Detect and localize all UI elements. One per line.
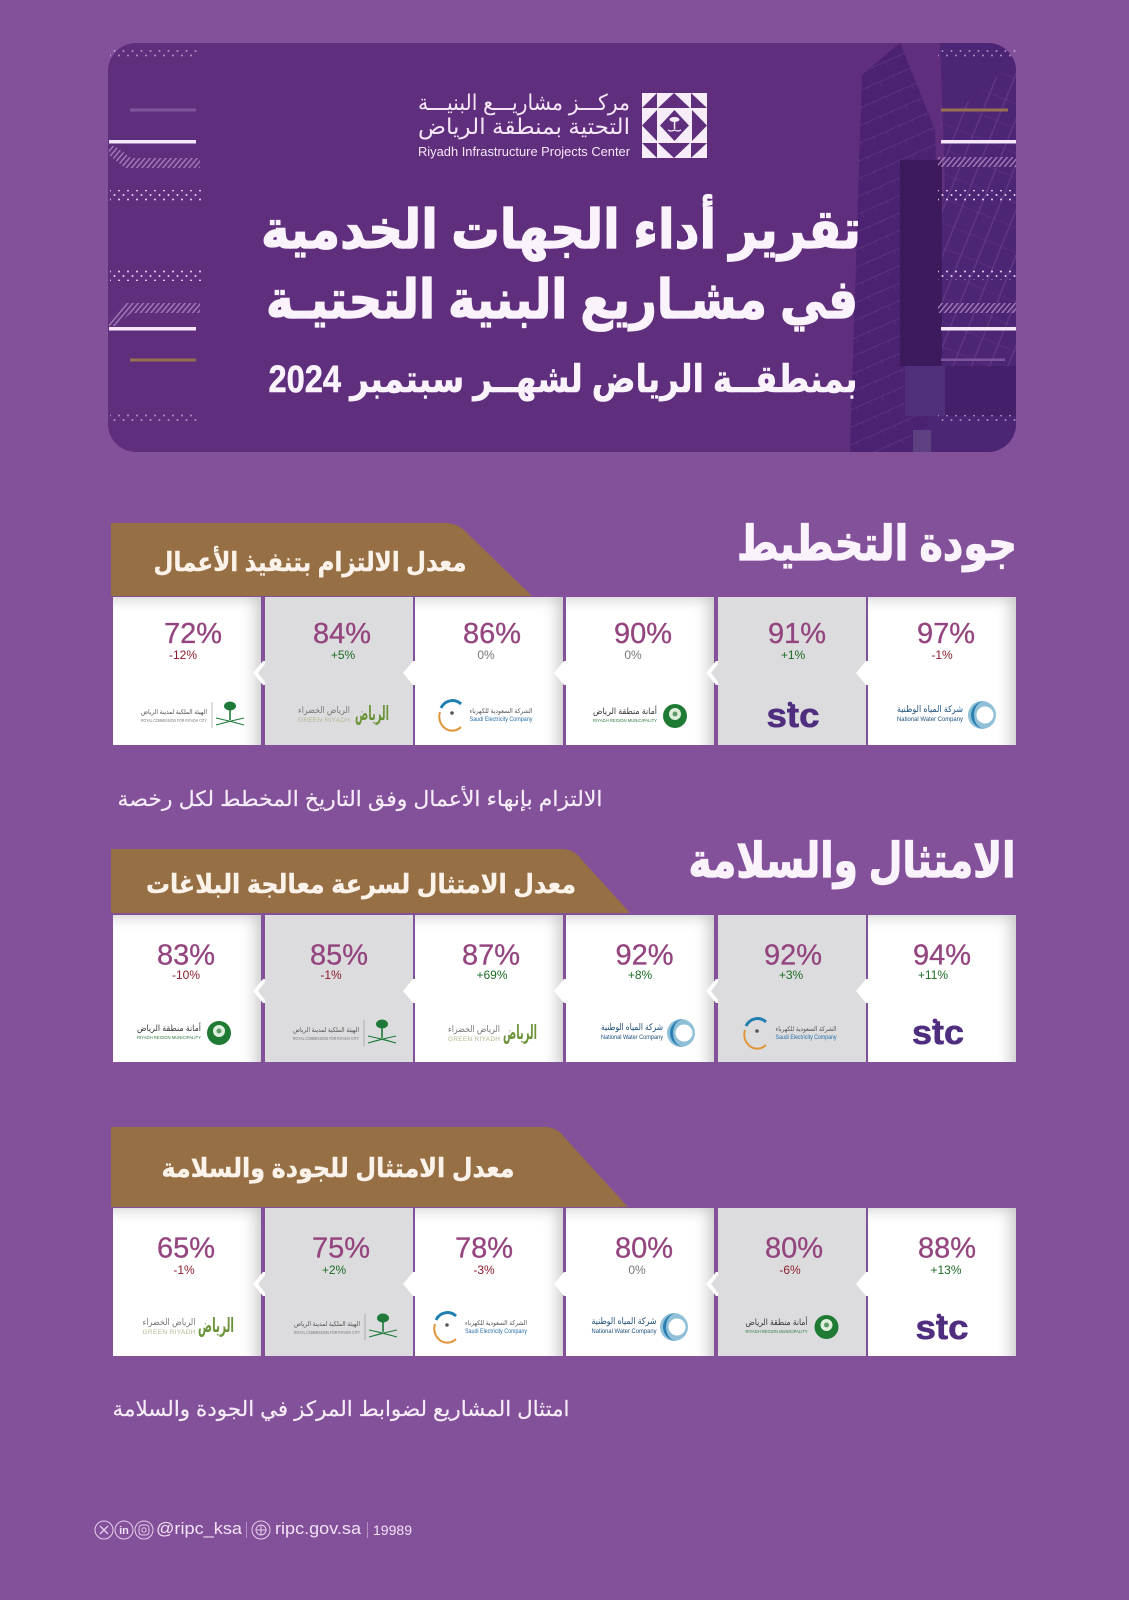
heading: compliance and safety: الامتثال والسلامة	[688, 835, 1016, 889]
card: stc 94%: stc	[912, 1014, 964, 1052]
skyline image	[850, 43, 1016, 452]
handle: @ripc_ksa	[156, 1519, 243, 1538]
card: Saudi Electricity 92%: Saudi Electricity Company	[776, 1035, 836, 1041]
card: National Water 80%	[566, 1208, 714, 1356]
card: Green Riyadh 65%: الرياض	[198, 1315, 234, 1337]
card: National Water 80%: National Water Company	[592, 1329, 656, 1335]
card: National Water 92%: شركة المياه الوطنية	[601, 1022, 663, 1032]
card: National Water 92%: 92%	[615, 940, 674, 972]
card: Green Riyadh 65%	[113, 1208, 261, 1356]
icon: X	[95, 1521, 113, 1539]
card: National Water 97%: -1%	[931, 648, 953, 662]
card: National Water 92%: +8%	[628, 968, 653, 982]
card: Green Riyadh 84%: الرياض	[355, 703, 389, 725]
card: Riyadh Municipality 80%: أمانة منطقة الرياض	[746, 1316, 808, 1327]
card: Green Riyadh 84%: 84%	[313, 618, 371, 650]
logo text: التحتية بمنطقة الرياض	[418, 114, 630, 140]
card: Saudi Electricity 78%: -3%	[473, 1263, 495, 1277]
card: Riyadh Municipality 83%: RIYADH REGION MUNICIPALITY	[137, 1035, 201, 1040]
decorative strips, left	[109, 49, 201, 421]
card: Royal Commission 72%: الهيئة الملكية لمدينة الرياض	[141, 709, 207, 716]
card: Green Riyadh 84%: GREEN RIYADH	[298, 717, 350, 724]
row 2: report response cards	[113, 915, 1016, 1062]
card: Saudi Electricity 86%: Saudi Electricity Company	[470, 717, 532, 723]
card: Green Riyadh 65%: الرياض الخضراء	[142, 1317, 196, 1327]
banner: work execution compliance	[111, 523, 532, 596]
card: stc 94%: 94%	[913, 940, 971, 972]
card: stc 91%: stc	[766, 697, 820, 735]
card: National Water 80%: شركة المياه الوطنية	[592, 1316, 656, 1326]
card: Green Riyadh 84%: +5%	[331, 648, 356, 662]
card: Riyadh Municipality 90%	[566, 597, 714, 745]
RIPC logo	[418, 90, 707, 159]
card: Riyadh Municipality 90%: 0%	[624, 648, 642, 662]
card: Saudi Electricity 86%: الشركة السعودية للكهرباء	[470, 708, 533, 715]
website: ripc.gov.sa	[275, 1519, 362, 1538]
card: stc 94%: +11%	[918, 968, 948, 982]
card: Green Riyadh 65%: -1%	[173, 1263, 195, 1277]
card: Green Riyadh 87%	[415, 915, 563, 1062]
card: Riyadh Municipality 83%	[113, 915, 261, 1062]
footer contacts	[95, 1519, 412, 1539]
logo text: Riyadh Infrastructure Projects Center	[418, 144, 631, 159]
card: Riyadh Municipality 80%: RIYADH REGION MUNICIPALITY	[746, 1329, 808, 1334]
decorative strips, right	[938, 50, 1016, 423]
icon: LinkedIn: in	[119, 1525, 129, 1537]
card: stc 88%	[868, 1208, 1016, 1356]
card: Royal Commission 85%: 85%	[310, 940, 368, 972]
card: Royal Commission 75%: +2%	[322, 1263, 347, 1277]
card: Green Riyadh 65%: GREEN RIYADH	[142, 1329, 196, 1336]
page graphics: hero, headings, banners, notes and footer	[94, 43, 1016, 1540]
card: Riyadh Municipality 80%	[718, 1208, 866, 1356]
logo text	[418, 90, 631, 159]
heading: planning quality: جودة التخطيط	[737, 518, 1017, 572]
card: National Water 92%	[566, 915, 714, 1062]
card: Royal Commission 85%: -1%	[320, 968, 342, 982]
card: Royal Commission 72%	[113, 597, 261, 745]
icon: globe	[252, 1521, 270, 1539]
card: Green Riyadh 87%: 87%	[462, 940, 520, 972]
card: Royal Commission 85%	[265, 915, 413, 1062]
card: Saudi Electricity 78%: 78%	[455, 1232, 513, 1264]
banner: quality and safety compliance: معدل الامتثال للجودة والسلامة	[162, 1153, 514, 1184]
row 1: execution compliance cards	[113, 597, 1016, 745]
note: quality and safety: امتثال المشاريع لضوابط المركز في الجودة والسلامة	[112, 1398, 570, 1421]
card: Riyadh Municipality 80%: 80%	[765, 1232, 823, 1264]
hero title	[261, 194, 861, 401]
note: planning: الالتزام بإنهاء الأعمال وفق التاريخ المخطط لكل رخصة	[118, 786, 602, 812]
card: Riyadh Municipality 90%: RIYADH REGION MUNICIPALITY	[593, 718, 657, 723]
banner: report response compliance	[111, 849, 630, 913]
card: National Water 80%: 0%	[628, 1263, 646, 1277]
card: Royal Commission 72%: ROYAL COMMISSION FOR RIYADH CITY	[141, 718, 207, 723]
icon: LinkedIn	[115, 1521, 133, 1539]
logo mark	[642, 93, 707, 158]
card: Saudi Electricity 86%: 0%	[477, 648, 495, 662]
card: Royal Commission 75%: ROYAL COMMISSION FOR RIYADH CITY	[294, 1330, 360, 1335]
card: Saudi Electricity 78%: الشركة السعودية للكهرباء	[465, 1320, 527, 1327]
card: Riyadh Municipality 80%: -6%	[779, 1263, 801, 1277]
logo text: مركـــز مشاريـــع البنيـــة	[418, 90, 630, 115]
card: National Water 97%	[868, 597, 1016, 745]
card: Riyadh Municipality 83%: -10%	[172, 968, 200, 982]
card: Green Riyadh 65%: 65%	[157, 1232, 215, 1264]
card: Saudi Electricity 92%: الشركة السعودية للكهرباء	[776, 1026, 837, 1033]
card: stc 94%	[868, 915, 1016, 1062]
card: Green Riyadh 87%: +69%	[476, 968, 508, 982]
card: stc 91%	[718, 597, 866, 745]
card: stc 91%: 91%	[768, 618, 826, 650]
card: stc 88%: +13%	[930, 1263, 962, 1277]
card: National Water 80%: 80%	[615, 1232, 673, 1264]
card: Royal Commission 85%: الهيئة الملكية لمدينة الرياض	[293, 1027, 359, 1034]
card: Riyadh Municipality 83%: 83%	[157, 940, 215, 972]
banner: quality and safety compliance	[111, 1127, 628, 1207]
card: Green Riyadh 84%	[265, 597, 413, 745]
card: Riyadh Municipality 83%: أمانة منطقة الرياض	[137, 1022, 201, 1033]
card: Green Riyadh 87%: الرياض الخضراء	[448, 1024, 500, 1034]
card: stc 88%: 88%	[918, 1232, 976, 1264]
card: National Water 97%: 97%	[917, 618, 975, 650]
card: Saudi Electricity 92%: 92%	[764, 940, 822, 972]
card: Royal Commission 72%: -12%	[169, 648, 197, 662]
card: Green Riyadh 87%: GREEN RIYADH	[448, 1036, 500, 1043]
icon: Instagram	[135, 1521, 153, 1539]
card: National Water 97%: National Water Company	[897, 717, 963, 723]
card: Saudi Electricity 86%	[415, 597, 563, 745]
card: Saudi Electricity 78%	[415, 1208, 563, 1356]
banner: report response compliance: معدل الامتثال لسرعة معالجة البلاغات	[146, 869, 576, 900]
banner: work execution compliance: معدل الالتزام بتنفيذ الأعمال	[154, 546, 466, 578]
card: Royal Commission 85%: ROYAL COMMISSION FOR RIYADH CITY	[293, 1036, 359, 1041]
card: Royal Commission 75%: 75%	[312, 1232, 370, 1264]
card: Green Riyadh 84%: الرياض الخضراء	[298, 705, 350, 715]
card: Riyadh Municipality 90%: أمانة منطقة الرياض	[593, 705, 657, 716]
card: Saudi Electricity 78%: Saudi Electricity Company	[465, 1329, 527, 1335]
card: stc 91%: +1%	[781, 648, 806, 662]
phone number: 19989	[373, 1523, 412, 1538]
card: Riyadh Municipality 90%: 90%	[614, 618, 672, 650]
hero panel	[108, 43, 1016, 452]
card: Royal Commission 75%: الهيئة الملكية لمدينة الرياض	[294, 1321, 360, 1328]
card: Saudi Electricity 92%	[718, 915, 866, 1062]
row 3: quality and safety cards	[113, 1208, 1016, 1356]
hero title: تقرير أداء الجهات الخدمية	[261, 194, 861, 261]
card: National Water 97%: شركة المياه الوطنية	[897, 704, 963, 714]
hero title: بمنطقــة الرياض لشهــر سبتمبر 2024	[269, 359, 858, 401]
card: Saudi Electricity 92%: +3%	[779, 968, 804, 982]
card: stc 88%: stc	[916, 1309, 968, 1347]
hero title: في مشـاريع البنية التحتيـة	[266, 270, 858, 331]
card: Green Riyadh 87%: الرياض	[503, 1022, 537, 1044]
card: Royal Commission 72%: 72%	[164, 618, 222, 650]
card: National Water 92%: National Water Company	[601, 1035, 663, 1041]
card: Saudi Electricity 86%: 86%	[463, 618, 521, 650]
card: Royal Commission 75%	[265, 1208, 413, 1356]
